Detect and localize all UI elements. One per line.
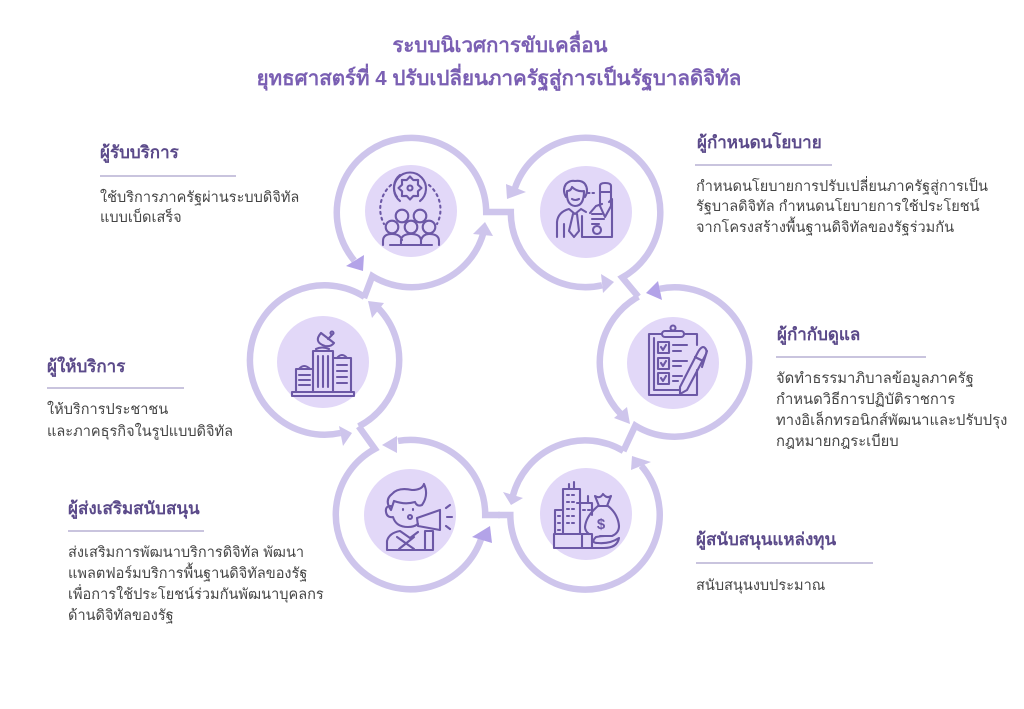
ring: promoters <box>336 426 500 589</box>
ring: policy makers <box>500 138 660 297</box>
text block: service providers: ให้บริการประชาชน <box>47 400 168 418</box>
ring: regulators <box>600 281 749 451</box>
text block: policy makers: รัฐบาลดิจิทัล กำหนดนโยบายการใช้ประโยชน์ <box>696 197 980 215</box>
text block: policy makers: ผู้กำหนดนโยบาย <box>697 132 822 154</box>
ring: service users <box>337 138 500 298</box>
text block: service providers: ผู้ให้บริการ <box>47 356 126 378</box>
icon: person with megaphone <box>364 469 456 561</box>
text block: funders <box>696 530 873 594</box>
text block: service users: ผู้รับบริการ <box>100 143 180 164</box>
icon: city and money bag <box>540 468 632 560</box>
title: ระบบนิเวศการขับเคลื่อน <box>392 30 608 57</box>
icon: policy maker with document <box>540 166 632 258</box>
ring: service providers <box>250 285 399 446</box>
text block: regulators: กฎหมายกฎระเบียบ <box>776 433 899 450</box>
text block: policy makers: กำหนดนโยบายการปรับเปลี่ยนภาครัฐสู่การเป็น <box>696 176 988 195</box>
text block: service users: ใช้บริการภาครัฐผ่านระบบดิจิทัล <box>100 188 299 206</box>
text block: service users <box>100 143 299 226</box>
ring: funders <box>498 440 660 590</box>
text block: promoters: ส่งเสริมการพัฒนาบริการดิจิทัล พัฒนา <box>68 545 304 561</box>
text block: service providers: และภาคธุรกิจในรูปแบบดิจิทัล <box>47 422 233 440</box>
text block: promoters: ผู้ส่งเสริมสนับสนุน <box>68 499 200 520</box>
text block: regulators: ผู้กำกับดูแล <box>777 325 860 346</box>
text block: regulators: จัดทำธรรมาภิบาลข้อมูลภาครัฐ <box>776 370 974 387</box>
icon: checklist clipboard <box>627 317 719 409</box>
text block: promoters: ด้านดิจิทัลของรัฐ <box>68 607 174 624</box>
title <box>257 30 741 92</box>
icon: city with satellite dish <box>277 316 369 408</box>
text block: promoters: แพลตฟอร์มบริการพื้นฐานดิจิทัลของรัฐ <box>68 562 307 582</box>
text block: funders: ผู้สนับสนุนแหล่งทุน <box>696 530 836 551</box>
text block: policy makers <box>695 132 988 236</box>
text block: service users: แบบเบ็ดเสร็จ <box>100 207 182 226</box>
cycle diagram <box>250 138 749 590</box>
text block: promoters: เพื่อการใช้ประโยชน์ร่วมกันพัฒนาบุคลกร <box>68 584 324 603</box>
icon: city and money bag: $ <box>597 516 606 533</box>
text block: service providers <box>47 356 233 440</box>
text block: regulators: ทางอิเล็กทรอนิกส์พัฒนาและปรับปรุง <box>776 410 1007 429</box>
text block: funders: สนับสนุนงบประมาณ <box>696 578 825 594</box>
title: ยุทธศาสตร์ที่ 4 ปรับเปลี่ยนภาครัฐสู่การเป็นรัฐบาลดิจิทัล <box>257 63 741 92</box>
text block: policy makers: จากโครงสร้างพื้นฐานดิจิทัลของรัฐร่วมกัน <box>696 216 954 236</box>
text block: regulators: กำหนดวิธีการปฏิบัติราชการ <box>776 391 955 408</box>
icon: people and gear <box>365 165 457 257</box>
text block: promoters <box>68 499 324 624</box>
text block: regulators <box>776 325 1007 450</box>
